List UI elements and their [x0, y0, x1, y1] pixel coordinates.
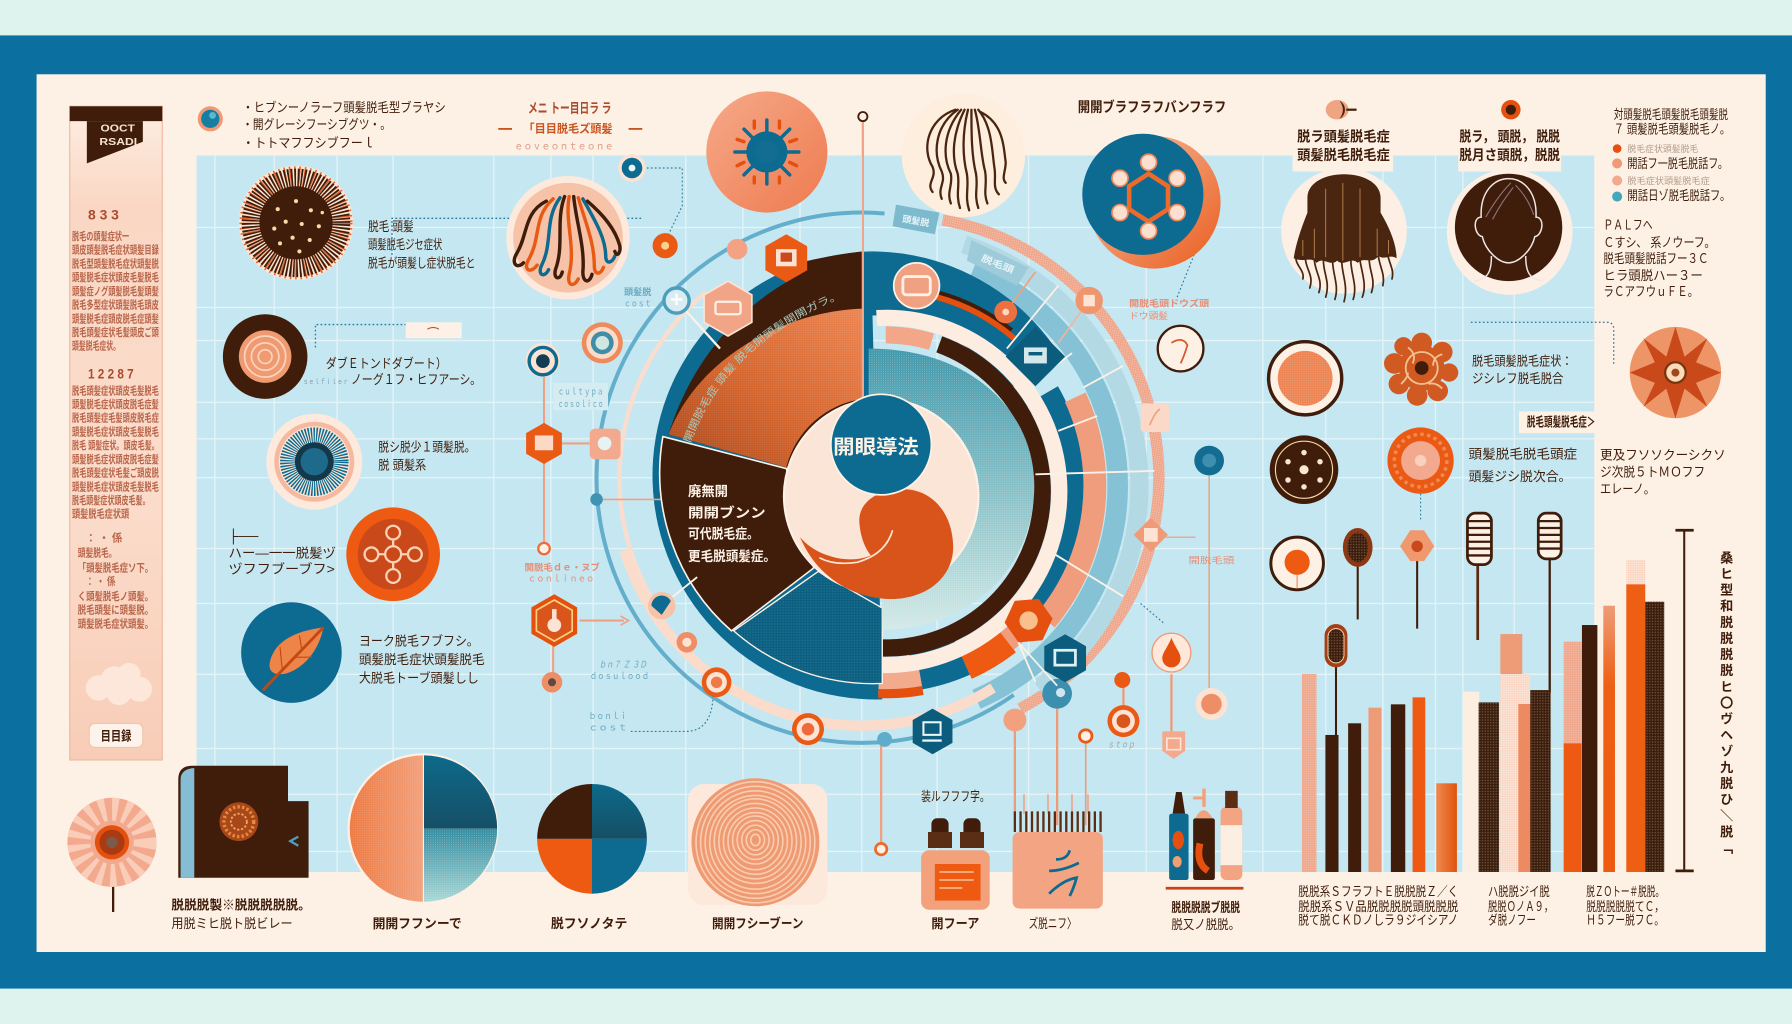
- text: bar captions: [1298, 884, 1664, 928]
- orange stippled wedge: [669, 309, 863, 467]
- icon: dark swirl disc: [223, 314, 307, 399]
- legend items: 脱毛症状頭髪脱毛症: [1627, 175, 1710, 186]
- dotted connector with label tab: [315, 322, 462, 347]
- label: 脱ラ頭髪脱毛症: [1297, 128, 1390, 146]
- label: [1293, 128, 1393, 171]
- panel: hair type A: [1281, 100, 1407, 302]
- text: bar captions: Ｈ５フー脱フＣ。: [1586, 913, 1664, 928]
- column text block 1: 頭髪症ノグ頭髪脱毛髪頭髪: [72, 284, 159, 298]
- small salmon caption: 開脱毛頭: [1189, 554, 1234, 565]
- icon: salmon stipple ring: [1269, 342, 1342, 415]
- text: leaf note: 大脱毛トーブ頭髪しし: [359, 669, 479, 685]
- dotted connector: [392, 218, 641, 257]
- dark ring: [685, 291, 1086, 692]
- sector banner labels: 頭髪脱: [901, 213, 930, 228]
- vertical axis text: 桑ヒ型和脱脱脱脱ヒ〇ヴヘゾ九脱ひ＼脱「: [1718, 550, 1733, 857]
- column text block 3: 頭髪脱毛。: [78, 546, 117, 560]
- outlined orange hexagon with connectors: [531, 594, 629, 693]
- brown wedge with text: 開開ブンン: [688, 505, 766, 521]
- caption: 開開フフンーで: [373, 916, 462, 931]
- text: teal follicle note: 脱 頭髪系: [378, 458, 426, 473]
- blue node with line: [590, 493, 661, 506]
- legend items: 脱毛症状頭髪脱毛: [1627, 143, 1698, 154]
- cream yin-yang disc: [784, 399, 978, 593]
- text: flower note: 脱毛頭髪脱毛症状：: [1472, 354, 1573, 369]
- cream ring: [703, 309, 1068, 674]
- column text block 3: く頭髪脱毛ノ頭髪。: [78, 589, 153, 603]
- small salmon caption: [1166, 537, 1234, 565]
- text: right description: Ｃすシ、 系ノウーフ。: [1603, 235, 1715, 250]
- icon: salmon dot: [727, 239, 747, 259]
- icon: teal node with stem: [1194, 446, 1224, 688]
- small teal caption: ｃｏｓｔ: [589, 722, 627, 732]
- column text block 1: [72, 207, 159, 353]
- brown wedge with text: 可代脱毛症。: [688, 525, 759, 541]
- label banner: 脱毛頭髪脱毛症＞: [1527, 413, 1595, 429]
- icon: comb box: [1013, 794, 1103, 931]
- ribbon flag: [70, 106, 162, 163]
- icon: virus circle: [706, 91, 827, 213]
- column text block 1: 脱毛の頭髪症状一: [72, 229, 129, 243]
- icon: flower pin: [1400, 530, 1434, 629]
- central circular chart: [594, 122, 1165, 745]
- legend items: [1612, 143, 1730, 203]
- orange arc on top band: [641, 241, 1131, 731]
- icon: multicolour hair circle: [506, 176, 630, 299]
- text: flower note: [1472, 354, 1573, 386]
- dotted connector: [631, 695, 713, 731]
- icon: orange dot: [653, 233, 678, 258]
- panel: left column: [70, 106, 162, 760]
- icon: eye: [198, 106, 223, 131]
- bar chart: [1302, 560, 1664, 872]
- text: follicle note: 脱毛 頭髪: [368, 219, 414, 234]
- icon: leaf node: [648, 577, 697, 619]
- icon: teal hexagon: [1044, 634, 1086, 682]
- icon: salmon node top right: [1058, 287, 1103, 343]
- top centre heading: [498, 101, 642, 153]
- divider line: [862, 117, 864, 398]
- orange hexagon with connectors: [526, 377, 621, 554]
- salmon dot with stem: [1003, 709, 1026, 823]
- text: bar captions: 脱脱系ＳフラフトＥ脱脱脱Ｚ／く: [1298, 884, 1458, 899]
- icon: fingerprint circle: [1195, 688, 1227, 720]
- text: book caption: [171, 898, 311, 931]
- text: bar captions: 脱脱系ＳＶ品脱脱脱脱頭脱脱脱: [1298, 899, 1458, 914]
- text: swirl note: ノーグ１フ・ヒフアーシ。: [351, 372, 481, 387]
- text: follicle note: 脱毛が頭髪し症状脱毛と: [368, 255, 475, 270]
- text: orange disc note: [229, 529, 336, 577]
- centre teal circle with title: [831, 394, 931, 495]
- icon: eye node: [526, 343, 560, 377]
- icon: orange teal ring: [582, 322, 623, 363]
- orange swirl: [800, 489, 953, 599]
- column text block 1: 脱毛型頭髪脱毛症状頭髪脱: [72, 256, 159, 270]
- column text block 1: 頭皮頭髪脱毛症状頭髪目録: [72, 243, 159, 257]
- column text block 2: 1 2 2 8 7: [88, 366, 134, 381]
- text: right description: ヒラ頭脱ハー３ー: [1603, 268, 1703, 283]
- column text block 2: 頭髪脱毛症状頭皮毛髪脱毛: [72, 424, 159, 438]
- text: bottle note: 装ルフフフ字。: [921, 789, 990, 804]
- column text block 2: [72, 366, 159, 521]
- top centre heading: ｅｏｖｅｏｎｔｅｏｎｅ: [514, 142, 614, 153]
- hair illustration: [1281, 168, 1407, 302]
- small teal label: [624, 286, 651, 308]
- chart: four-colour pie: [537, 784, 647, 931]
- label: 脱ラ， 頭脱， 脱脱: [1459, 128, 1561, 146]
- fingerprint pad: [688, 778, 827, 931]
- caption: 開開フシーブーン: [712, 915, 803, 931]
- text: dial note: 頭髪ジシ脱次合。: [1469, 469, 1571, 484]
- text: follicle note: [368, 219, 475, 270]
- icon: leaf disc: [241, 602, 342, 703]
- column text block 1: 8 3 3: [88, 207, 119, 222]
- column text block 2: 脱毛頭髪症毛髪頭皮脱毛症: [72, 411, 159, 425]
- column text block 3: ： ・ 係: [86, 574, 116, 588]
- text: swirl note: ダブＥトンドダブート）: [326, 355, 447, 371]
- legend block: 対頭髪脱毛頭髪脱毛頭髪脱: [1614, 107, 1728, 122]
- dotted connector to drop: [1141, 603, 1163, 623]
- legend block: [1612, 107, 1730, 203]
- icon: salmon badge on top band: [894, 263, 939, 309]
- caption: 脱脱脱脱ブ脱脱: [1171, 899, 1240, 915]
- text: dial note: 頭髪脱毛脱毛頭症: [1469, 446, 1577, 461]
- icon: follicle pin: [1343, 528, 1373, 619]
- brown wedge with text: [660, 437, 814, 631]
- text: bar captions: ダ脱ノフー: [1488, 913, 1536, 928]
- icon: drop with stem and tag: [1152, 633, 1191, 759]
- small teal label: ｃｏｓｔ: [624, 298, 651, 308]
- text: orange disc note: ヅフフブーブフ>: [229, 561, 335, 577]
- icon: orange sector badge: [1000, 590, 1058, 651]
- sector banner labels: [893, 205, 1029, 286]
- icon: orange target: [702, 667, 731, 697]
- text: teal follicle note: 脱シ脱少１頭髪脱。: [378, 439, 475, 454]
- small salmon label: ｃｏｎｌｉｎｅｏ: [528, 574, 594, 584]
- small salmon label: 開脱毛ｄｅ・ヌブ: [525, 561, 600, 572]
- text: swirl note: [303, 355, 481, 387]
- icon: dark pattern disc: [1270, 435, 1338, 504]
- pie base disc: [652, 251, 882, 700]
- brown wedge with text: 廃無開: [688, 483, 728, 499]
- top note with eye icon: ・トトマフフシブフーｌ: [242, 134, 375, 150]
- caption: ズ脱ニフ〉: [1029, 916, 1077, 931]
- column text block 1: 頭髪脱毛症頭皮脱毛症頭髪: [72, 311, 159, 325]
- column text block 1: 頭髪脱毛症状頭皮毛髪脱毛: [72, 270, 159, 284]
- dotted connector: [1420, 494, 1422, 520]
- light teal stippled dish: [869, 349, 1034, 630]
- legend items: 開話日ゾ脱毛脱話フ。: [1627, 188, 1730, 203]
- icon: dropper bottle: [921, 818, 990, 931]
- text: book caption: 脱脱脱製※脱脱脱脱脱。: [171, 898, 311, 913]
- sector banner labels: 脱毛頭: [980, 252, 1017, 276]
- icon: teal hexagon: [913, 709, 952, 754]
- column text block 3: [78, 531, 153, 630]
- text: teal follicle note: [378, 439, 475, 473]
- text: right description: 脱毛頭髪脱話フー３Ｃ: [1603, 251, 1709, 266]
- text: star note: ジ次脱５トＭＯフフ: [1600, 465, 1705, 480]
- button: 目目録: [101, 729, 131, 744]
- icon: dark book: [178, 766, 309, 878]
- icon: pleated flower: [67, 798, 157, 912]
- chart: split pie: [347, 753, 498, 931]
- icon: follicle pin low: [1325, 624, 1347, 737]
- connector to ball: [1018, 642, 1057, 686]
- label banner: [1519, 411, 1602, 433]
- column text block 2: 頭髪脱毛症状頭皮脱毛症髪: [72, 397, 159, 411]
- column text block 2: 脱毛頭髪症状毛髪ご頭皮脱: [72, 466, 159, 480]
- text: right description: ＰＡＬフヘ: [1603, 218, 1653, 233]
- text: leaf note: [359, 633, 485, 685]
- icon: product bottles: 脱又ノ脱脱。: [1171, 917, 1240, 932]
- small pale label: ｃｕｌｔｙｐａ: [558, 386, 603, 397]
- column text block 2: 頭髪脱毛症状頭皮脱毛症髪: [72, 452, 159, 466]
- icon: spiky follicle ball: [239, 166, 353, 280]
- column text block 1: 脱毛頭髪症状毛髪頭皮ご頭: [72, 325, 159, 339]
- icon: teal spiky follicle: [266, 414, 362, 510]
- text: bar captions: ハ脱脱ジイ脱: [1488, 884, 1550, 899]
- icon: orange dial disc: [1387, 427, 1454, 494]
- small teal caption: ｄｏｓｕｌｏｏｄ: [590, 671, 649, 681]
- text: bar captions: 脱脱脱脱脱てＣ，: [1586, 899, 1664, 914]
- top note with eye icon: ・開グレーシフーシブグツ・。: [242, 116, 391, 132]
- icon: acorn: [1326, 100, 1357, 119]
- icon: brown hair circle: [902, 94, 1025, 217]
- text: star note: 更及フソソクーシクソ: [1600, 447, 1726, 462]
- scale bracket: [1675, 530, 1694, 871]
- text: follicle note: 頭髪脱毛ジセ症状: [368, 237, 442, 252]
- blue dot with stem: [875, 732, 892, 855]
- icon: orange hexagon: [765, 234, 807, 282]
- text: flower note: ジシレフ脱毛脱合: [1472, 371, 1563, 386]
- icon: brown line circle: [1158, 326, 1203, 371]
- head illustration: [1447, 169, 1573, 295]
- icon: pale ring node: [664, 288, 689, 313]
- small grey caption: ｓｔｏｐ: [1107, 739, 1135, 750]
- dotted connector: [1177, 194, 1200, 297]
- small teal caption: ｂｎ７ Ｚ ３Ｄ: [599, 659, 647, 669]
- icon: comb pin tall: [1538, 513, 1561, 693]
- text: swirl note: ｓｅｌｆｉｌｅｒ: [303, 378, 349, 386]
- ribbon flag: OOCT: [101, 123, 136, 134]
- text: right description: [1603, 218, 1715, 299]
- column text block 2: 脱毛頭髪症状頭皮毛髪。: [72, 493, 150, 507]
- column text block 1: 脱毛多型症状頭髪脱毛頭皮: [72, 298, 159, 312]
- blue ball with stem: [1042, 679, 1072, 825]
- icon: orange node and target: [1107, 672, 1139, 737]
- ribbon flag: RSADI: [99, 137, 137, 148]
- column text block 1: 頭髪脱毛症状。: [72, 339, 120, 353]
- column text block 2: 頭髪脱毛症状頭: [72, 507, 129, 521]
- label: [1458, 128, 1561, 171]
- pale blue and cream orbit bands: [492, 108, 1231, 847]
- white spokes: [1007, 286, 1154, 682]
- thin ring pin: [1079, 730, 1092, 825]
- brown wedge with text: 更毛脱頭髪症。: [688, 548, 776, 564]
- text: orange disc note: ├──: [229, 529, 259, 545]
- icon: target ring: [1271, 537, 1323, 590]
- caption: 脱フソノタテ: [551, 916, 627, 931]
- text: right description: ラＣアフウｕＦＥ。: [1603, 284, 1698, 299]
- column text block 3: 頭髪脱毛症状頭髪。: [78, 616, 153, 630]
- icon: salmon hexagon: [704, 281, 752, 336]
- small salmon label: [525, 561, 600, 584]
- outer hatched ring: [594, 175, 1200, 781]
- icon: orange node: [994, 272, 1035, 323]
- icon: teal ring node: [618, 154, 646, 182]
- icon: star circle: [1630, 327, 1721, 418]
- icon: dot: [1501, 100, 1521, 119]
- label: 脱月さ頭脱，脱脱: [1459, 146, 1561, 164]
- text: dial note: [1469, 446, 1577, 484]
- legend items: 開話フ一脱毛脱話フ。: [1627, 156, 1728, 171]
- small salmon caption: [1129, 297, 1210, 321]
- text: bar captions: 脱ＺＯトー＃脱脱。: [1586, 884, 1664, 899]
- icon: product bottles: [1166, 789, 1243, 932]
- small teal label: 頭髪脱: [624, 286, 651, 297]
- chart nodes, lower right: [875, 194, 1234, 855]
- chart nodes, upper left: [525, 234, 824, 745]
- text: book caption: 用脱ミヒ脱ト脱ビレー: [171, 916, 293, 931]
- small pale label: ｃｏｓｏｌｉｃｏ: [558, 399, 603, 409]
- decorative cloud illustration: [86, 663, 152, 705]
- label: 頭髪脱毛脱毛症: [1297, 146, 1390, 164]
- small salmon caption: ドウ頭髪: [1129, 310, 1168, 321]
- icon: orange target: [792, 713, 824, 745]
- small pale label: [553, 383, 608, 410]
- icon: small orange ring: [677, 632, 697, 653]
- dotted bracket: [1471, 322, 1614, 366]
- column text block 2: 脱毛 頭髪症状。頭皮毛髪。: [72, 438, 159, 452]
- icon: pale salmon badge: [1141, 403, 1169, 432]
- column text block 2: 脱毛頭髪症状頭皮毛髪脱毛: [72, 383, 159, 397]
- dotted connector: [647, 168, 682, 234]
- dark teal stippled wedge: [734, 571, 882, 684]
- text: bar captions: 脱脱ＯノＡ９，: [1488, 899, 1553, 914]
- arc label text: 開開脱毛症 頭髪 脱毛開頭髪開開ガラ。: [683, 296, 834, 443]
- panel: hair type B: [1447, 100, 1573, 295]
- shelf: [1166, 887, 1243, 890]
- column text block 3: ： ・ 係: [86, 531, 122, 545]
- caption: 開フーア: [931, 916, 979, 931]
- legend block: ７ 頭髪脱毛頭髪脱毛ノ。: [1614, 122, 1730, 137]
- top centre heading: メニ トー目日ラ ラ: [528, 101, 611, 116]
- icon: comb pin: [1467, 513, 1491, 640]
- icon: salmon diamond: [1134, 518, 1168, 552]
- text: star note: [1600, 447, 1726, 497]
- connector from hexagon: [677, 301, 720, 349]
- centre teal circle with title: 開眼導法: [833, 436, 919, 459]
- text: leaf note: 頭髪脱毛症状頭髪脱毛: [359, 652, 485, 667]
- column text block 2: 頭髪脱毛症状頭皮毛髪脱毛: [72, 479, 159, 493]
- icon: curly orange flower: [1384, 333, 1458, 406]
- text: orange disc note: ハー―一一脱髪ヅ: [229, 546, 336, 561]
- small salmon caption: 開脱毛頭ドウズ頭: [1129, 297, 1210, 308]
- icon: teal tile: [1006, 327, 1065, 386]
- top note with eye icon: ・ヒブンーノラーフ頭髪脱毛型ブラヤシ: [242, 99, 446, 115]
- text: leaf note: ヨーク脱毛フブフシ。: [359, 633, 479, 649]
- right-side ring sectors: [608, 208, 1164, 764]
- top ring end dot: [858, 112, 867, 121]
- button: [89, 723, 143, 747]
- top note with eye icon: [198, 99, 446, 150]
- column text block 3: 脱毛頭髪に頭髪脱。: [78, 603, 153, 617]
- text: star note: エレーノ。: [1600, 482, 1655, 497]
- column text block 3: 「頭髪脱毛症ソ下。: [78, 560, 153, 574]
- small teal caption: [589, 711, 627, 732]
- small teal caption: ｂｏｎｌｉ: [589, 711, 627, 721]
- top centre heading: 「目目脱毛ズ頭髪: [523, 122, 613, 136]
- icon: orange cell disc: [346, 507, 440, 601]
- icon: molecule circle: [1082, 134, 1221, 269]
- text: top centre-right heading: 開開ブラフラフバンフラフ: [1078, 98, 1226, 116]
- small teal caption: [590, 659, 649, 681]
- text: bar captions: 脱て脱ＣＫＤノしラ９ジイシアノ: [1298, 913, 1458, 928]
- top-left brown band: [669, 251, 863, 467]
